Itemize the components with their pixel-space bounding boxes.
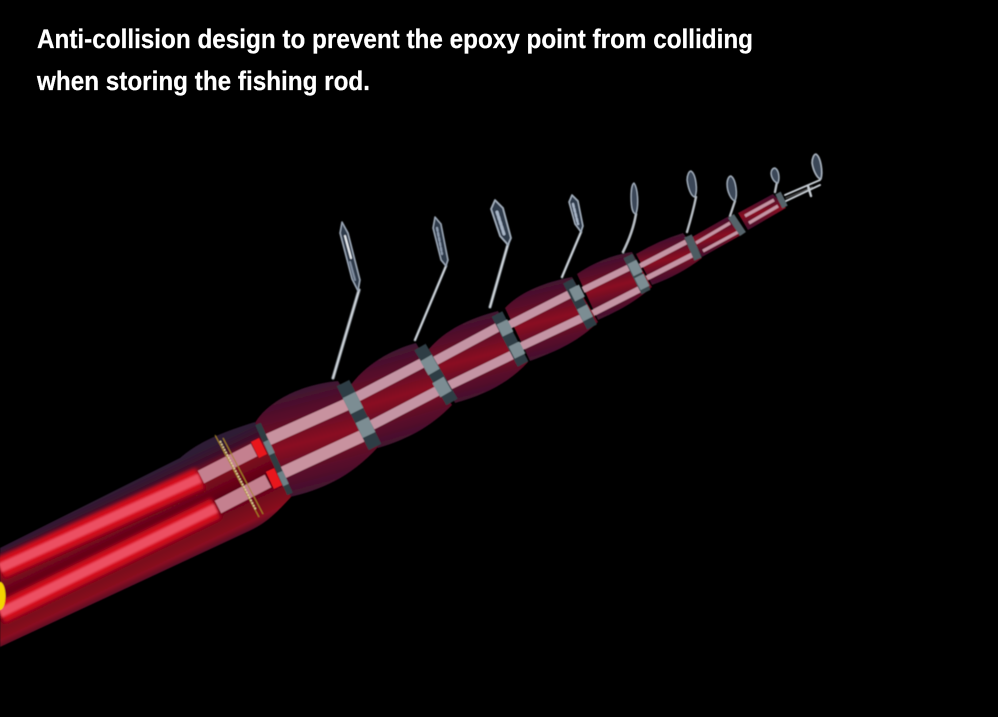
band at joint 5 xyxy=(568,281,592,327)
band at joint 4 xyxy=(497,314,523,364)
guide 2 xyxy=(415,217,448,340)
heading: when storing the fishing rod. xyxy=(36,66,370,96)
band at joint 1 xyxy=(258,424,290,494)
section 5 xyxy=(577,252,652,320)
yellow logo dot xyxy=(0,582,6,610)
section 6 xyxy=(636,233,702,285)
band at joint 6 xyxy=(628,256,646,292)
section 7 xyxy=(692,216,743,257)
band at joint 2 xyxy=(343,383,375,447)
section 2 xyxy=(350,343,452,448)
guide 1 xyxy=(333,222,360,378)
gold wraps xyxy=(215,435,263,517)
guide 3 xyxy=(490,200,511,307)
guide 7 xyxy=(727,176,736,216)
guide 5 xyxy=(623,183,638,252)
section 4 xyxy=(505,277,598,361)
butt section xyxy=(0,422,291,647)
tip section 8 xyxy=(738,194,786,230)
section 3 xyxy=(429,311,528,403)
epoxy bands xyxy=(258,193,785,494)
band at joint 3 xyxy=(420,347,452,402)
guide 6 xyxy=(687,171,696,232)
band at joint 8 xyxy=(731,216,743,234)
guide 8 xyxy=(771,168,779,192)
band at joint 7 xyxy=(688,236,698,259)
line guides xyxy=(333,154,822,378)
guide 4 xyxy=(562,195,583,277)
fishing rod xyxy=(0,154,822,647)
heading xyxy=(36,24,753,96)
red highlight stripes xyxy=(0,440,278,613)
heading: Anti-collision design to prevent the epoxy point from colliding xyxy=(37,24,753,54)
tip guide xyxy=(785,154,822,201)
band at joint 9 xyxy=(778,193,785,207)
section 1 xyxy=(255,381,378,497)
